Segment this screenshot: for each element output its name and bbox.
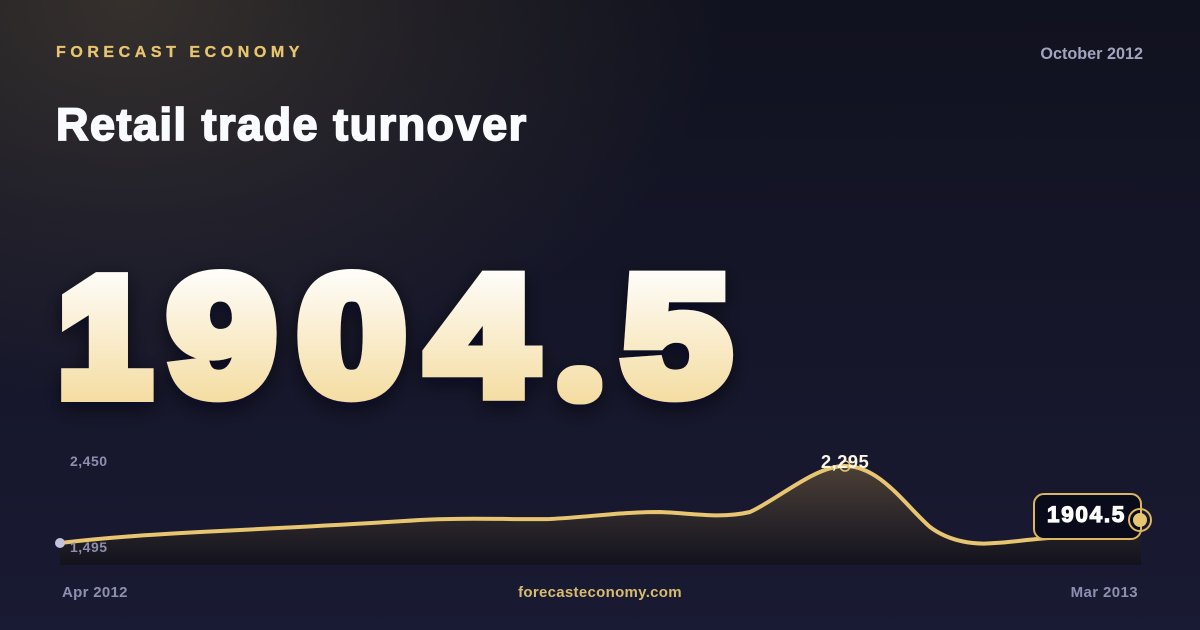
line — [60, 466, 1050, 544]
peak marker — [840, 461, 850, 471]
eyebrow: brand name: FORECAST ECONOMY — [56, 44, 304, 61]
headline value: . — [575, 360, 585, 393]
start point — [55, 538, 65, 548]
sparkline chart — [55, 451, 1152, 565]
current value callout — [1034, 494, 1141, 539]
axis label: max: 2,450 — [70, 453, 108, 469]
date label: October 2012 — [1040, 45, 1143, 63]
headline value — [58, 242, 736, 430]
current value callout: 1904.5 — [1047, 502, 1126, 527]
area under line — [60, 466, 1141, 565]
axis label: min: 1,495 — [70, 539, 108, 555]
headline value: 5 — [623, 242, 730, 430]
headline value: 1 — [59, 245, 150, 429]
headline value: 904 — [168, 242, 535, 430]
source url: forecasteconomy.com — [518, 584, 682, 601]
current point — [1129, 509, 1151, 531]
title: Retail trade turnover — [56, 99, 528, 150]
x axis end label: Mar 2013 — [1071, 584, 1138, 601]
peak label: 2,295 — [821, 451, 869, 472]
x axis start label: Apr 2012 — [62, 584, 128, 601]
